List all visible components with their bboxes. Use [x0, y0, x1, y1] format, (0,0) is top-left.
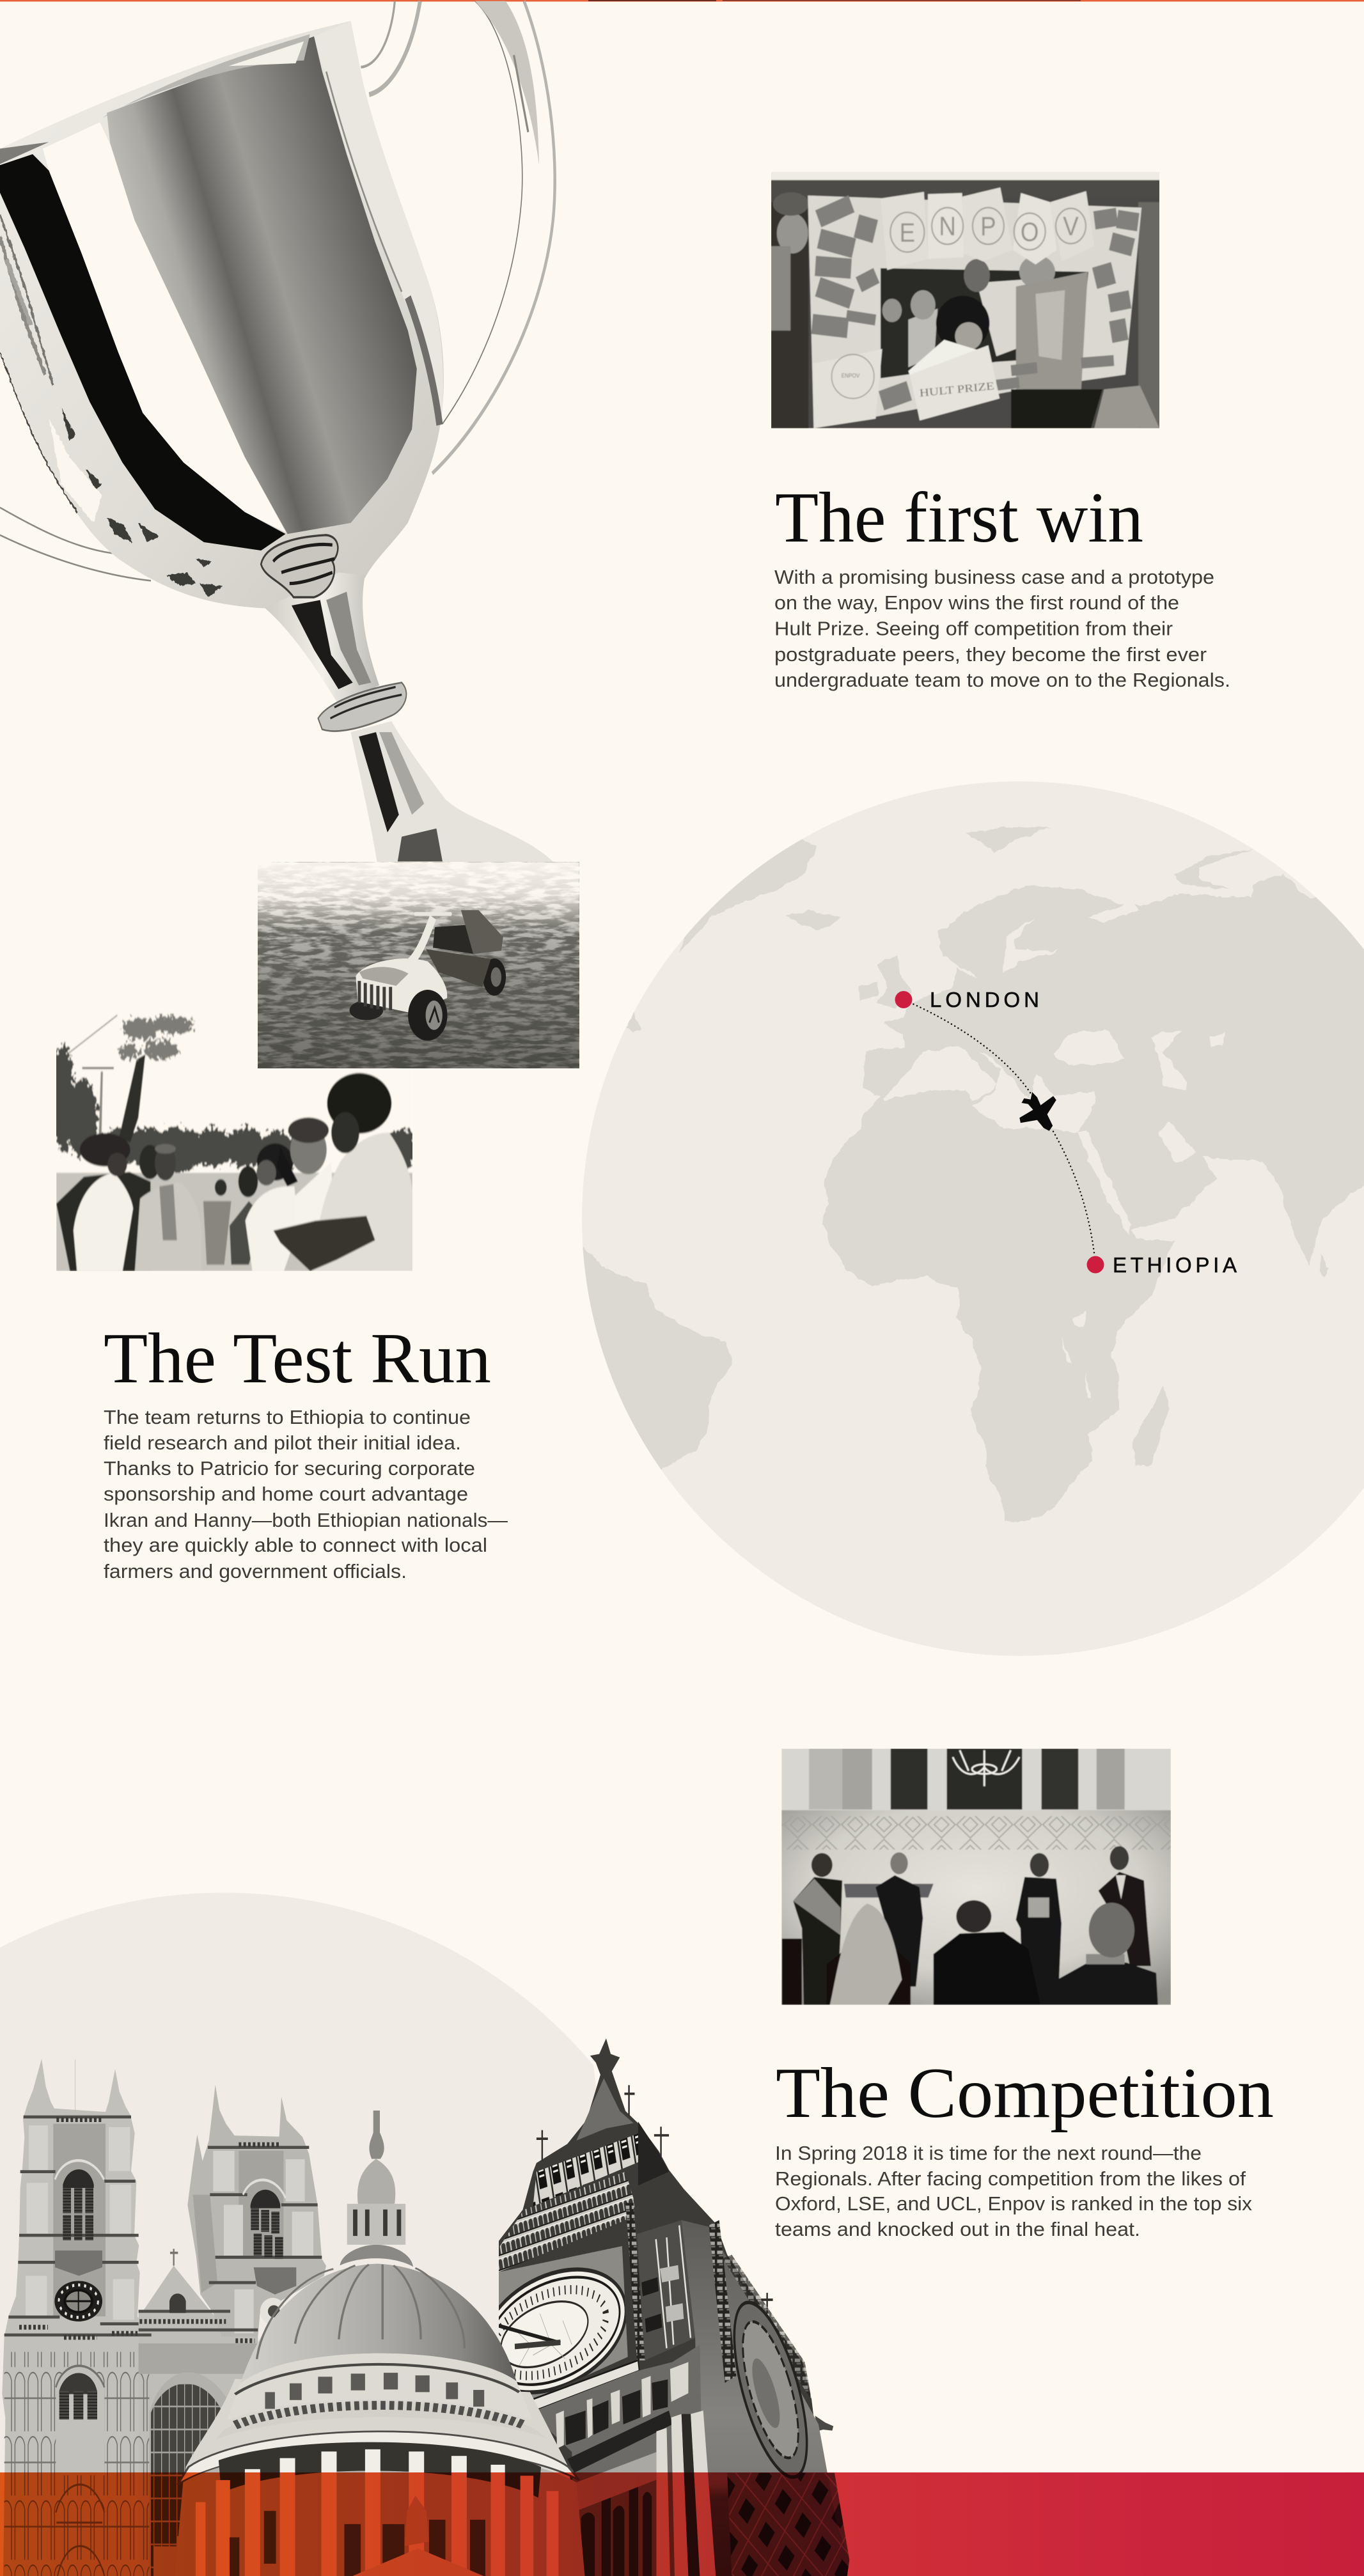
east wall diamond coffers: [727, 2473, 849, 2576]
colonnade niches: [230, 2511, 485, 2576]
trophy cup body: [0, 21, 444, 608]
ornament panels: [55, 2251, 296, 2295]
Sri Lanka: [1320, 1254, 1330, 1278]
corner pilaster: [625, 2203, 645, 2361]
Greenland: [678, 839, 817, 951]
gable window and rose: [169, 2293, 186, 2313]
west clock face wall: [471, 2241, 636, 2416]
east face shaded wall: [682, 2220, 849, 2576]
top accent line: [0, 0, 1364, 1]
field backdrop: [56, 1011, 412, 1271]
Saint Paul's Cathedral: [175, 2111, 584, 2576]
cornices: [4, 2117, 322, 2335]
image: people meeting in field: [52, 1011, 416, 1271]
text block: test run description: The team returns to Ethiopia to continue: [104, 1406, 471, 1428]
colonnade shadow: [219, 2442, 541, 2498]
Enpov letter tiles: E: [900, 219, 915, 248]
distant tree line: [52, 1045, 416, 1174]
abbey clock: [54, 2281, 102, 2322]
statues and pediment: [352, 2549, 483, 2576]
robot machine: [350, 910, 506, 1041]
text block: first win description: undergraduate team to move on to the Regionals.: [774, 669, 1230, 691]
image: team holding Enpov frame: [771, 172, 1160, 428]
Enpov letter tiles: V: [1063, 212, 1079, 241]
text block: first win description: [774, 566, 1230, 691]
text block: competition description: [775, 2142, 1253, 2240]
chandelier: [953, 1750, 1019, 1786]
icon: airplane: [1019, 1092, 1056, 1131]
colonnade wall: [175, 2449, 584, 2576]
bottom gradient band: [0, 2472, 1364, 2576]
trophy handles: [0, 1, 555, 581]
cathedral lantern: [340, 2111, 413, 2267]
text block: first win description: With a promising business case and a prototype: [774, 566, 1214, 588]
text block: test run description: farmers and government officials.: [104, 1560, 407, 1582]
Ireland: [858, 981, 878, 1003]
heading: The first win: The first win: [775, 478, 1143, 558]
great west window: [149, 2372, 230, 2576]
trophy lower reflection: [0, 215, 223, 597]
group of people: [56, 1073, 412, 1271]
trophy gray face: [107, 36, 417, 534]
inland seas: [883, 902, 1225, 1398]
belfry: [533, 2134, 640, 2206]
cathedral dome: [240, 2263, 517, 2384]
world land masses: [556, 827, 1364, 1522]
audience silhouettes: [782, 1900, 1158, 2005]
flight route dotted line: [913, 1004, 1095, 1255]
Novaya Zemlya and Arctic shore: [1174, 849, 1310, 910]
text block: competition description: Regionals. After facing competition from the likes of: [775, 2167, 1246, 2190]
frame side pictures: [811, 195, 1140, 410]
stage wall and ceiling: [781, 1749, 1171, 2005]
Big Ben clock tower: [471, 2038, 849, 2576]
trophy right band: [0, 21, 443, 425]
lower facade niches: [4, 2352, 149, 2576]
Enpov letter tiles: P: [980, 212, 996, 241]
text block: test run description: they are quickly able to connect with local: [104, 1534, 487, 1556]
text block: first win description: Hult Prize. Seeing off competition from their: [774, 618, 1173, 639]
text block: competition description: teams and knocked out in the final heat.: [775, 2218, 1140, 2240]
colonnade columns: [196, 2449, 558, 2576]
heading: The Test Run: The Test Run: [104, 1319, 491, 1398]
Svalbard: [965, 827, 1051, 851]
upper window left tower: [55, 2160, 104, 2240]
east tower panel: [637, 2220, 695, 2361]
Enpov letter tiles: [881, 187, 1094, 270]
image: silver trophy: [0, 1, 555, 863]
large tree: [67, 1015, 194, 1143]
ornamental frieze: [499, 2172, 636, 2272]
statue: [404, 2495, 429, 2546]
image: Enpov robot prototype on field: [258, 862, 579, 1068]
cathedral drum: [175, 2379, 584, 2576]
gargoyle: [815, 2416, 833, 2432]
Hult Prize sign: HULT PRIZE: [919, 379, 995, 400]
Newfoundland: [626, 1013, 642, 1032]
roof shingles: [576, 2078, 634, 2141]
marker: Ethiopia: ETHIOPIA: [1113, 1253, 1237, 1277]
lower column bars: [656, 2410, 716, 2576]
lower left arched window: [56, 2366, 104, 2475]
text block: test run description: [104, 1406, 508, 1582]
east clock face: [719, 2287, 822, 2493]
text block: competition description: In Spring 2018 it is time for the next round—the: [775, 2142, 1202, 2164]
dome base and windows: [227, 2354, 533, 2421]
buttress tracery in band: [56, 2485, 104, 2576]
marker: London: LONDON: [930, 988, 1039, 1011]
trophy black reflection: [0, 154, 285, 550]
abbey right tower body: [187, 2085, 326, 2337]
abbey gable cross: [170, 2249, 178, 2266]
abbey center gable and nave: [139, 2266, 260, 2576]
text block: test run description: sponsorship and home court advantage: [104, 1483, 468, 1505]
Enpov letter tiles: O: [1021, 218, 1039, 247]
image: team pitching on stage: [781, 1749, 1171, 2005]
balustrades: [19, 2119, 279, 2341]
lower west wall: [531, 2345, 704, 2576]
abbey antenna: [74, 2059, 75, 2110]
balustrade: [216, 2401, 547, 2440]
dome ribs: [257, 2265, 464, 2359]
poster logo corner: ENPOV: [842, 372, 860, 379]
Enpov letter tiles: N: [939, 212, 956, 241]
text block: test run description: Ikran and Hanny—both Ethiopian nationals—: [104, 1509, 508, 1531]
poster logo corner: [813, 349, 882, 428]
heading: The Competition: The Competition: [776, 2054, 1274, 2133]
ground texture: [258, 862, 579, 1068]
entablature: [178, 2432, 579, 2485]
steeple pinnacle crosses: [537, 2085, 773, 2314]
presenters: [793, 1846, 1151, 2005]
South America: [556, 1247, 732, 1510]
text block: competition description: Oxford, LSE, and UCL, Enpov is ranked in the top six: [775, 2192, 1253, 2215]
east chain moulding: [709, 2220, 736, 2383]
text block: test run description: field research and pilot their initial idea.: [104, 1432, 461, 1454]
Great Britain: [877, 956, 911, 1007]
frame opening with people: [881, 255, 1102, 428]
tower silhouette: [499, 2038, 849, 2576]
background circle behind London skyline: [0, 1893, 659, 2576]
image: London skyline landmarks: [2, 2038, 849, 2576]
upper window right tower: [243, 2180, 286, 2259]
grass field: [56, 1173, 412, 1271]
photo backdrop: [771, 172, 1160, 428]
Madagascar: [1133, 1387, 1170, 1467]
Africa and Eurasia: [822, 864, 1364, 1522]
Hult Prize sign: [910, 345, 999, 421]
Iceland: [786, 910, 842, 930]
trophy stem: [261, 535, 554, 863]
poster frame: [808, 196, 1141, 428]
text block: first win description: postgraduate peers, they become the first ever: [774, 643, 1207, 666]
clock base inscription strip: [528, 2361, 639, 2412]
globe disc: [582, 781, 1364, 1656]
trophy bright highlight: [43, 122, 286, 533]
text block: first win description: on the way, Enpov wins the first round of the: [774, 591, 1179, 614]
tower panel shading: [53, 2124, 283, 2316]
text block: test run description: Thanks to Patricio for securing corporate: [104, 1457, 475, 1479]
Westminster Abbey: [2, 2059, 326, 2576]
map: globe with flight route: [556, 781, 1364, 1656]
abbey left tower body: [2, 2059, 153, 2576]
